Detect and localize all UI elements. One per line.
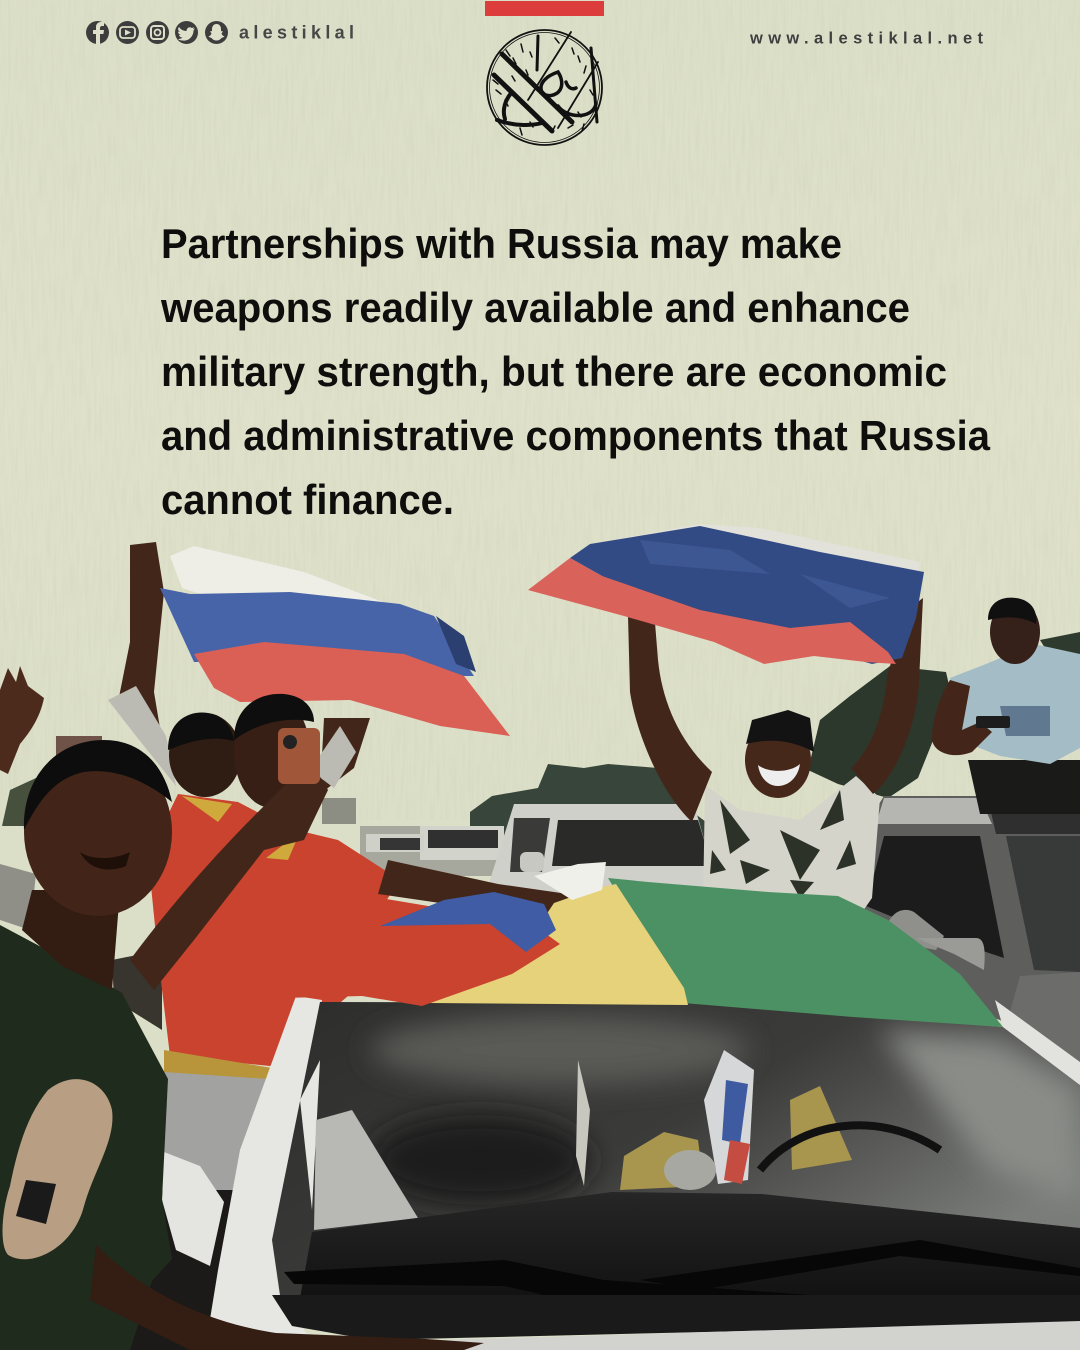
photo: white seat xyxy=(162,1152,224,1266)
headline xyxy=(160,220,991,523)
photo: Russian flag left xyxy=(160,546,510,736)
photo: dark area under arm xyxy=(120,1190,260,1350)
headline: weapons readily available and enhance xyxy=(160,284,910,331)
photo: distant trees and skyline xyxy=(2,632,1080,876)
photo: boy in foreground xyxy=(0,740,484,1350)
website url: www.alestiklal.net xyxy=(749,30,984,48)
photo: man standing on SUV xyxy=(932,598,1080,814)
photo: central man with raised arms xyxy=(628,598,923,928)
headline: cannot finance. xyxy=(161,476,454,523)
photo: white car in the background xyxy=(490,804,718,894)
photo: man in red shirt taking selfie xyxy=(130,694,582,1196)
social icons xyxy=(86,21,228,44)
headline: Partnerships with Russia may make xyxy=(161,220,842,267)
handle: alestiklal: alestiklal xyxy=(239,22,354,42)
headline: military strength, but there are economic xyxy=(161,348,947,395)
headline: and administrative components that Russia xyxy=(161,412,991,459)
red top bar xyxy=(485,1,604,16)
photo: white car body and windshield xyxy=(205,996,1080,1350)
photo: man at left with raised arm behind xyxy=(0,542,370,1030)
photo: Mali flag on car roof xyxy=(282,862,1003,1027)
photo: Russian flag right xyxy=(528,524,924,664)
logo: calligraphic seal xyxy=(487,30,602,145)
photo: grey SUV on the right xyxy=(852,796,1080,1070)
